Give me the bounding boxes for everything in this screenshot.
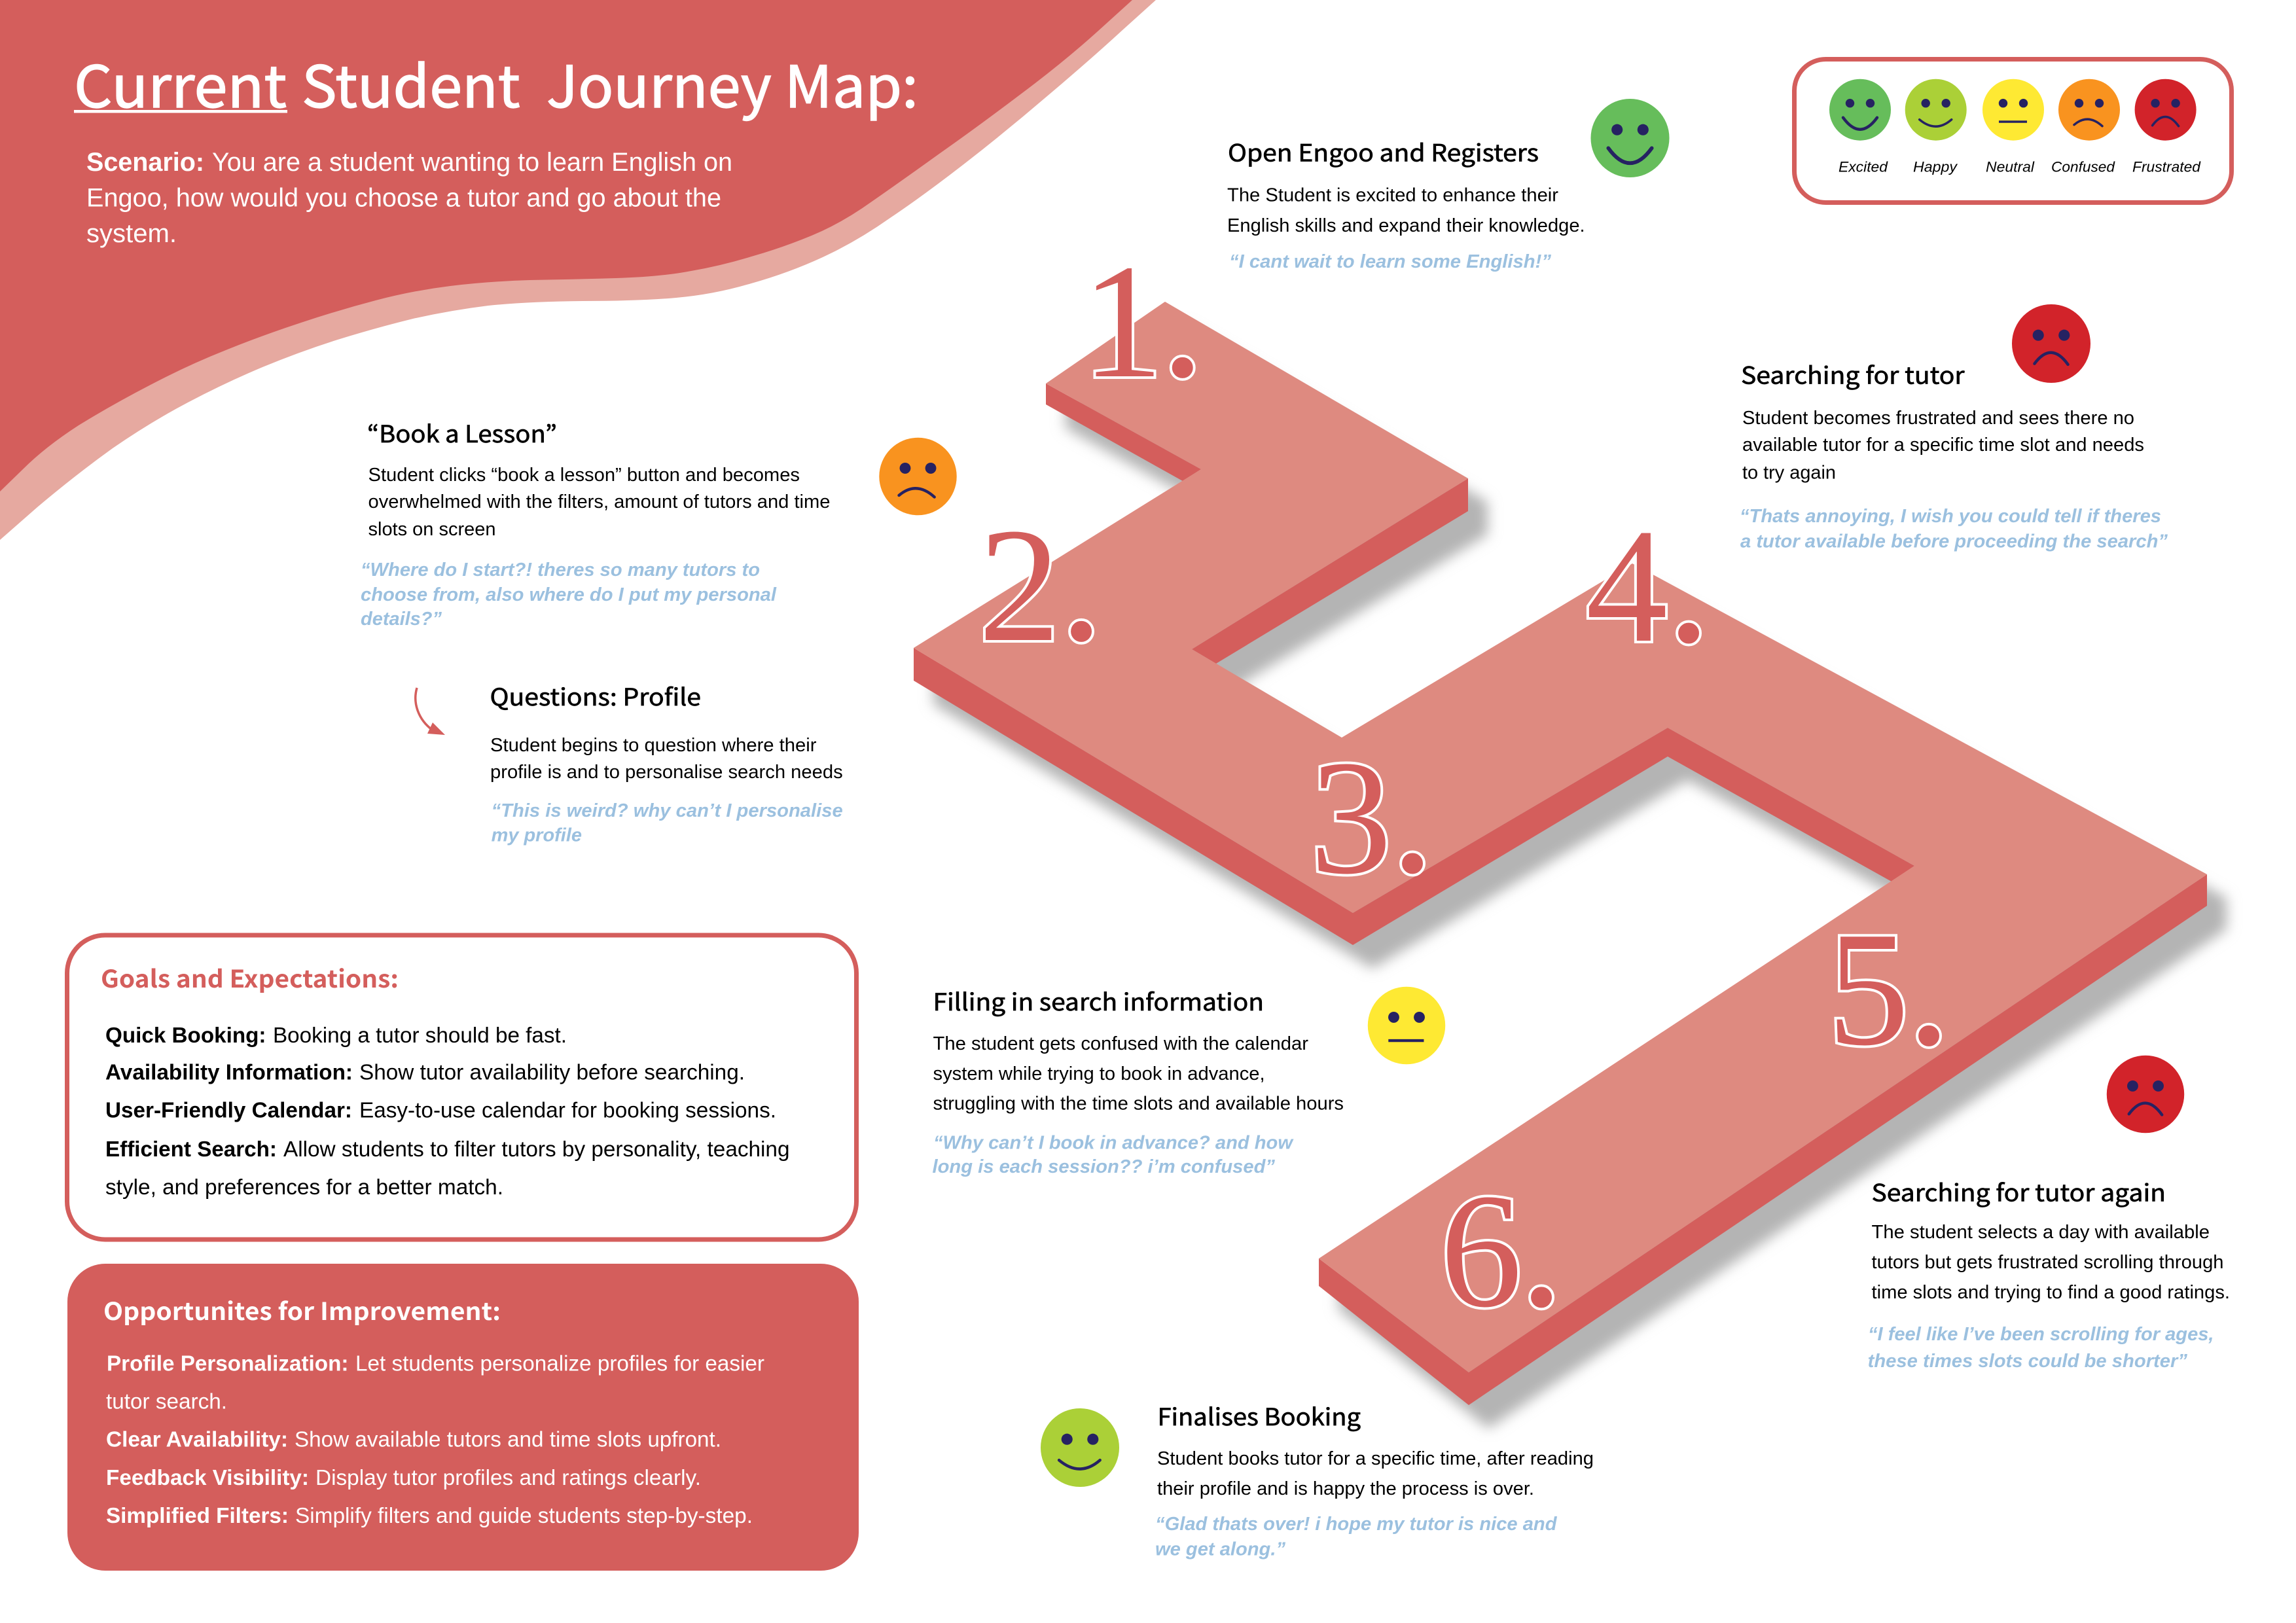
step 1 text: Open Engoo and Registers: “I cant wait to learn some English!” <box>1229 251 1551 272</box>
panel: goals and expectations <box>67 935 856 1240</box>
panel: opportunities for improvement <box>67 1264 859 1571</box>
opportunities list: Clear Availability: <box>106 1427 288 1452</box>
step 6 text: Finalises Booking: Student books tutor for a specific time, after reading <box>1157 1448 1594 1469</box>
step 4 text: Searching for tutor: Searching for tutor <box>1741 357 1965 391</box>
goals list: Efficient Search: <box>105 1137 277 1161</box>
step number 3: 3 <box>1310 727 1391 908</box>
opportunities list: Profile Personalization: <box>107 1351 348 1375</box>
step 5 text: Searching for tutor again <box>1868 1175 2230 1372</box>
opportunities list: Let students personalize profiles for easier <box>355 1351 764 1375</box>
step 2 text: Book a Lesson: “Where do I start?! theres so many tutors to <box>361 560 760 580</box>
step 6 text: Finalises Booking: we get along.” <box>1155 1539 1286 1560</box>
icon: neutral face <box>1368 987 1445 1064</box>
step number 1: . <box>1160 219 1204 414</box>
step 2b text: Questions: Profile <box>490 679 843 846</box>
step 3 text: Filling in search information: The student gets confused with the calendar <box>933 1033 1308 1054</box>
title: Current <box>74 41 287 124</box>
step 1 text: Open Engoo and Registers: The Student is excited to enhance their <box>1227 185 1558 206</box>
legend: happy: Happy <box>1913 159 1958 175</box>
step 2 text: Book a Lesson <box>361 416 830 630</box>
step 2 text: Book a Lesson: details?” <box>361 609 442 630</box>
opportunities list <box>106 1351 764 1527</box>
step 3 text: Filling in search information: long is each session?? i’m confused” <box>932 1156 1276 1177</box>
icon: excited face <box>1590 99 1670 177</box>
step 4 text: Searching for tutor: available tutor for a specific time slot and needs <box>1742 435 2144 455</box>
step number 6: 6 <box>1440 1160 1522 1342</box>
step 2b text: Questions: Profile: “This is weird? why can’t I personalise <box>492 800 843 821</box>
legend: confused: Confused <box>2051 159 2115 175</box>
step 1 text: Open Engoo and Registers: English skills and expand their knowledge. <box>1227 215 1585 236</box>
scenario text: Engoo, how would you choose a tutor and go about the <box>86 183 721 212</box>
isometric journey path <box>914 302 2227 1429</box>
background wave: light band <box>0 0 1156 540</box>
opportunities list: Show available tutors and time slots upfront. <box>295 1427 721 1452</box>
legend: neutral: Neutral <box>1986 159 2035 175</box>
scenario text: Scenario: <box>86 148 204 177</box>
goals heading: Goals and Expectations: <box>101 959 399 995</box>
step 2b text: Questions: Profile: my profile <box>492 825 582 846</box>
step 5 text: Searching for tutor again: Searching for tutor again <box>1872 1175 2166 1209</box>
title: Student Journey Map: <box>302 41 918 124</box>
legend: frustrated: Frustrated <box>2132 159 2201 175</box>
step 5 text: Searching for tutor again: these times slots could be shorter” <box>1868 1351 2187 1372</box>
step 5 text: Searching for tutor again: tutors but gets frustrated scrolling through <box>1872 1252 2224 1273</box>
step number 5 <box>1827 887 1951 1082</box>
goals list: Availability Information: <box>105 1060 353 1084</box>
opportunities heading: Opportunites for Improvement: <box>103 1292 501 1327</box>
step 2b text: Questions: Profile: profile is and to personalise search needs <box>490 762 843 783</box>
step number 4 <box>1586 484 1711 680</box>
step number 4: . <box>1666 484 1711 680</box>
step 5 text: Searching for tutor again: “I feel like I’ve been scrolling for ages, <box>1868 1324 2214 1345</box>
step number 5: . <box>1907 887 1951 1082</box>
scenario text: system. <box>86 219 177 248</box>
step 4 text: Searching for tutor: “Thats annoying, I wish you could tell if theres <box>1740 506 2161 527</box>
legend: happy <box>1905 79 1967 175</box>
step number 2: . <box>1059 482 1103 678</box>
step 2b text: Questions: Profile: Student begins to question where their <box>490 735 817 756</box>
opportunities list: Simplify filters and guide students step-by-step. <box>295 1503 753 1527</box>
step 1 text: Open Engoo and Registers <box>1227 135 1585 272</box>
step number 3: . <box>1390 715 1435 910</box>
goals list: Easy-to-use calendar for booking sessions. <box>359 1098 776 1122</box>
icon: happy face <box>1041 1408 1119 1487</box>
step number 6 <box>1440 1148 1564 1344</box>
step 3 text: Filling in search information: system while trying to book in advance, <box>933 1063 1265 1084</box>
goals list: Show tutor availability before searching. <box>359 1060 745 1084</box>
background wave: dark header shape <box>0 0 1132 491</box>
step number 6: . <box>1519 1148 1564 1344</box>
step 3 text: Filling in search information <box>932 984 1344 1177</box>
goals list <box>105 1023 789 1199</box>
step number 1 <box>1081 219 1204 414</box>
goals list: User-Friendly Calendar: <box>105 1098 352 1122</box>
opportunities list: Feedback Visibility: <box>106 1465 309 1489</box>
step 5 text: Searching for tutor again: time slots and trying to find a good ratings. <box>1872 1282 2230 1303</box>
icon: frustrated face <box>2012 304 2090 383</box>
scenario text: You are a student wanting to learn English on <box>212 148 732 177</box>
step 2 text: Book a Lesson: Student clicks “book a lesson” button and becomes <box>368 465 800 486</box>
goals list: Booking a tutor should be fast. <box>273 1023 567 1047</box>
legend: excited <box>1829 79 1891 175</box>
icon: frustrated face 2 <box>2107 1056 2184 1133</box>
arrow to profile questions <box>416 688 445 735</box>
step 6 text: Finalises Booking: their profile and is happy the process is over. <box>1157 1478 1534 1499</box>
step 6 text: Finalises Booking: “Glad thats over! i hope my tutor is nice and <box>1155 1514 1558 1535</box>
legend: neutral <box>1982 79 2044 175</box>
step 2 text: Book a Lesson: overwhelmed with the filters, amount of tutors and time <box>368 491 830 512</box>
step 3 text: Filling in search information: struggling with the time slots and available hours <box>933 1094 1344 1115</box>
step 1 text: Open Engoo and Registers: Open Engoo and Registers <box>1228 135 1539 169</box>
step 3 text: Filling in search information: Filling in search information <box>933 984 1264 1018</box>
legend: frustrated <box>2132 79 2201 175</box>
step number 3 <box>1310 715 1435 910</box>
step number 2: 2 <box>978 495 1060 676</box>
opportunities list: tutor search. <box>106 1389 227 1414</box>
step 6 text: Finalises Booking <box>1155 1399 1594 1560</box>
scenario text <box>86 148 732 248</box>
legend panel <box>1795 59 2232 203</box>
step number 5: 5 <box>1827 899 1909 1080</box>
step 5 text: Searching for tutor again: The student selects a day with available <box>1872 1222 2210 1243</box>
step number 4: 4 <box>1586 495 1668 677</box>
goals list: style, and preferences for a better match. <box>105 1175 503 1199</box>
step 4 text: Searching for tutor <box>1740 357 2168 552</box>
legend: excited: Excited <box>1839 159 1888 175</box>
step number 1: 1 <box>1081 231 1164 412</box>
goals list: Quick Booking: <box>105 1023 266 1047</box>
step 2 text: Book a Lesson: slots on screen <box>368 519 496 540</box>
icon: confused face <box>879 438 957 515</box>
step 6 text: Finalises Booking: Finalises Booking <box>1157 1399 1361 1433</box>
step number 2 <box>978 482 1103 678</box>
step 4 text: Searching for tutor: Student becomes frustrated and sees there no <box>1742 408 2134 429</box>
step 3 text: Filling in search information: “Why can’t I book in advance? and how <box>933 1133 1294 1154</box>
goals list: Allow students to filter tutors by personality, teaching <box>283 1137 789 1161</box>
opportunities list: Display tutor profiles and ratings clearly. <box>315 1465 701 1489</box>
step 2b text: Questions: Profile: Questions: Profile <box>490 679 701 713</box>
opportunities list: Simplified Filters: <box>106 1503 289 1527</box>
legend: confused <box>2051 79 2120 175</box>
step 4 text: Searching for tutor: a tutor available before proceeding the search” <box>1740 531 2168 552</box>
step 4 text: Searching for tutor: to try again <box>1742 463 1836 484</box>
step 2 text: Book a Lesson: choose from, also where do I put my personal <box>361 584 777 605</box>
step 2 text: Book a Lesson: “Book a Lesson” <box>367 416 557 450</box>
